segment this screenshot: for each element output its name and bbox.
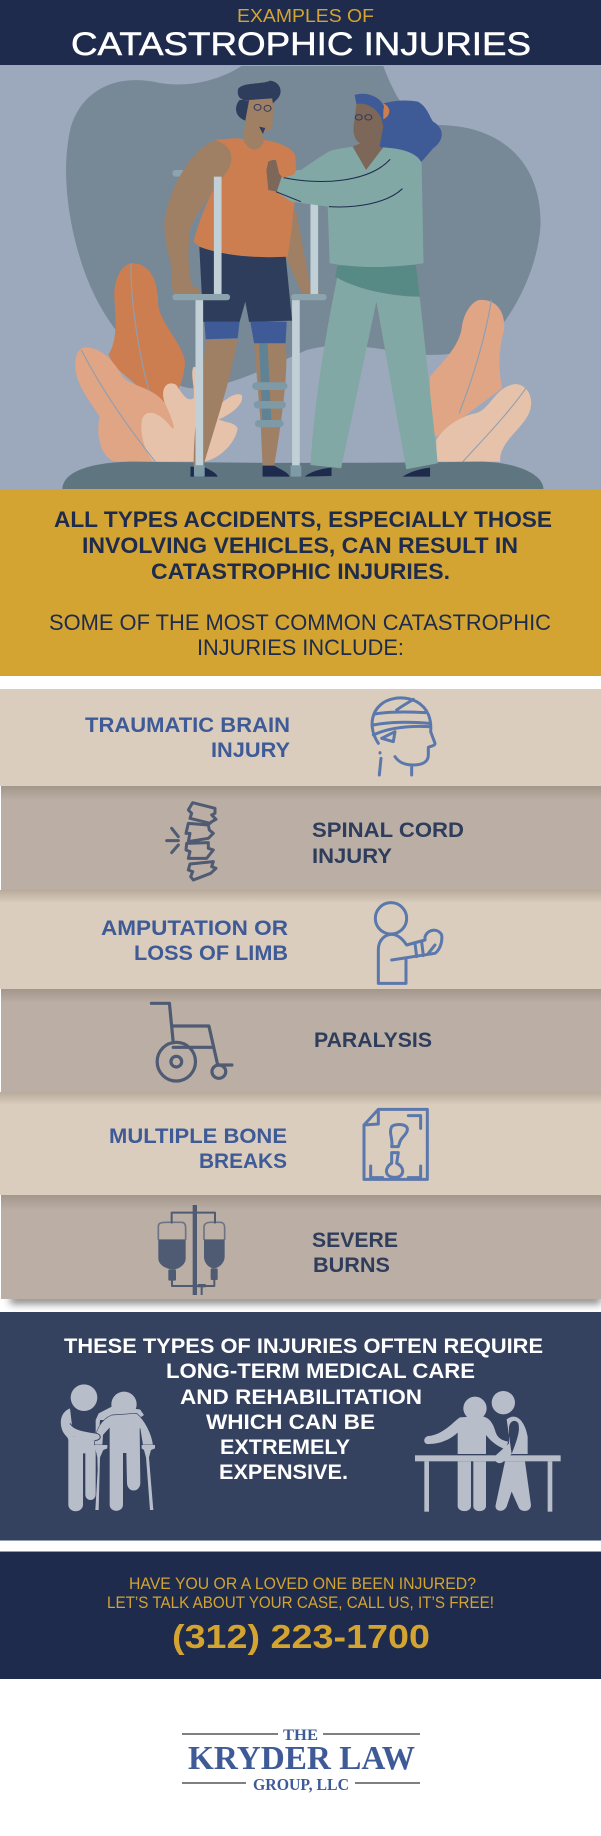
call to action text: HAVE YOU OR A LOVED ONE BEEN INJURED? — [129, 1575, 476, 1593]
row: severe burns — [1, 1195, 601, 1299]
icon: x-ray — [364, 1109, 427, 1179]
icon: therapist helping patient at table — [415, 1391, 561, 1512]
icon: person with cast arm — [375, 903, 442, 983]
man — [164, 81, 330, 477]
row: paralysis — [1, 989, 601, 1092]
header banner — [0, 0, 601, 65]
label: SEVERE — [312, 1229, 398, 1252]
label: INJURY — [312, 845, 392, 868]
label: AMPUTATION OR — [101, 917, 288, 940]
rehabilitation text: EXPENSIVE. — [219, 1461, 348, 1484]
background blob — [66, 66, 541, 388]
rehabilitation text: EXTREMELY — [220, 1436, 350, 1459]
rehabilitation text: LONG-TERM MEDICAL CARE — [166, 1360, 475, 1383]
call to action text: LET’S TALK ABOUT YOUR CASE, CALL US, IT’S FREE! — [107, 1594, 494, 1612]
icon: wheelchair — [151, 1003, 232, 1081]
icon: bandaged head — [372, 698, 435, 775]
row: traumatic brain injury — [0, 689, 601, 786]
intro statement: CATASTROPHIC INJURIES. — [151, 559, 450, 584]
label: TRAUMATIC BRAIN — [85, 714, 290, 737]
list intro: SOME OF THE MOST COMMON CATASTROPHIC — [49, 610, 551, 635]
label: LOSS OF LIMB — [134, 942, 288, 965]
row: amputation or loss of limb — [0, 890, 601, 989]
icon: caregiver supporting person on crutches — [61, 1384, 155, 1511]
subtitle: EXAMPLES OF — [237, 6, 374, 26]
call to action text — [107, 1575, 494, 1612]
label — [312, 819, 464, 868]
illustration: patient and nurse with crutches — [0, 65, 601, 490]
logo: The Kryder Law Group: KRYDER LAW — [188, 1740, 415, 1777]
list intro: INJURIES INCLUDE: — [197, 635, 404, 660]
rehabilitation panel — [0, 1312, 601, 1541]
label: BREAKS — [199, 1150, 287, 1173]
label: SPINAL CORD — [312, 819, 464, 842]
ground — [62, 462, 544, 489]
left crutch top handle — [172, 170, 230, 177]
logo: The Kryder Law Group — [182, 1727, 420, 1794]
intro statement — [54, 507, 552, 584]
logo: The Kryder Law Group: GROUP, LLC — [253, 1775, 349, 1794]
label — [312, 1229, 398, 1277]
row: multiple bone breaks — [0, 1092, 601, 1195]
title: CATASTROPHIC INJURIES — [71, 26, 531, 62]
label: MULTIPLE BONE — [109, 1125, 287, 1148]
rehabilitation text: THESE TYPES OF INJURIES OFTEN REQUIRE — [64, 1335, 543, 1358]
gold intro panel — [0, 489, 601, 676]
left plant — [75, 263, 242, 462]
rehabilitation text: WHICH CAN BE — [206, 1411, 375, 1434]
crutches — [172, 170, 327, 477]
rehabilitation text — [64, 1335, 543, 1484]
rehabilitation text: AND REHABILITATION — [180, 1386, 422, 1409]
call to action panel — [0, 1551, 601, 1679]
label: BURNS — [313, 1254, 390, 1277]
label — [101, 917, 288, 965]
nurse — [266, 94, 442, 477]
list intro — [49, 610, 551, 660]
phone number: (312) 223-1700 — [172, 1618, 430, 1655]
intro statement: ALL TYPES ACCIDENTS, ESPECIALLY THOSE — [54, 507, 552, 532]
label — [85, 714, 290, 762]
row: spinal cord injury — [1, 786, 601, 890]
label — [109, 1125, 287, 1173]
intro statement: INVOLVING VEHICLES, CAN RESULT IN — [82, 533, 518, 558]
label: PARALYSIS — [314, 1029, 432, 1052]
icon: IV drip — [158, 1205, 225, 1295]
right plant — [430, 300, 531, 470]
shadow under list — [10, 1294, 601, 1304]
label: INJURY — [211, 739, 290, 762]
icon: spine — [167, 803, 216, 880]
logo: The Kryder Law Group: THE — [283, 1727, 318, 1744]
